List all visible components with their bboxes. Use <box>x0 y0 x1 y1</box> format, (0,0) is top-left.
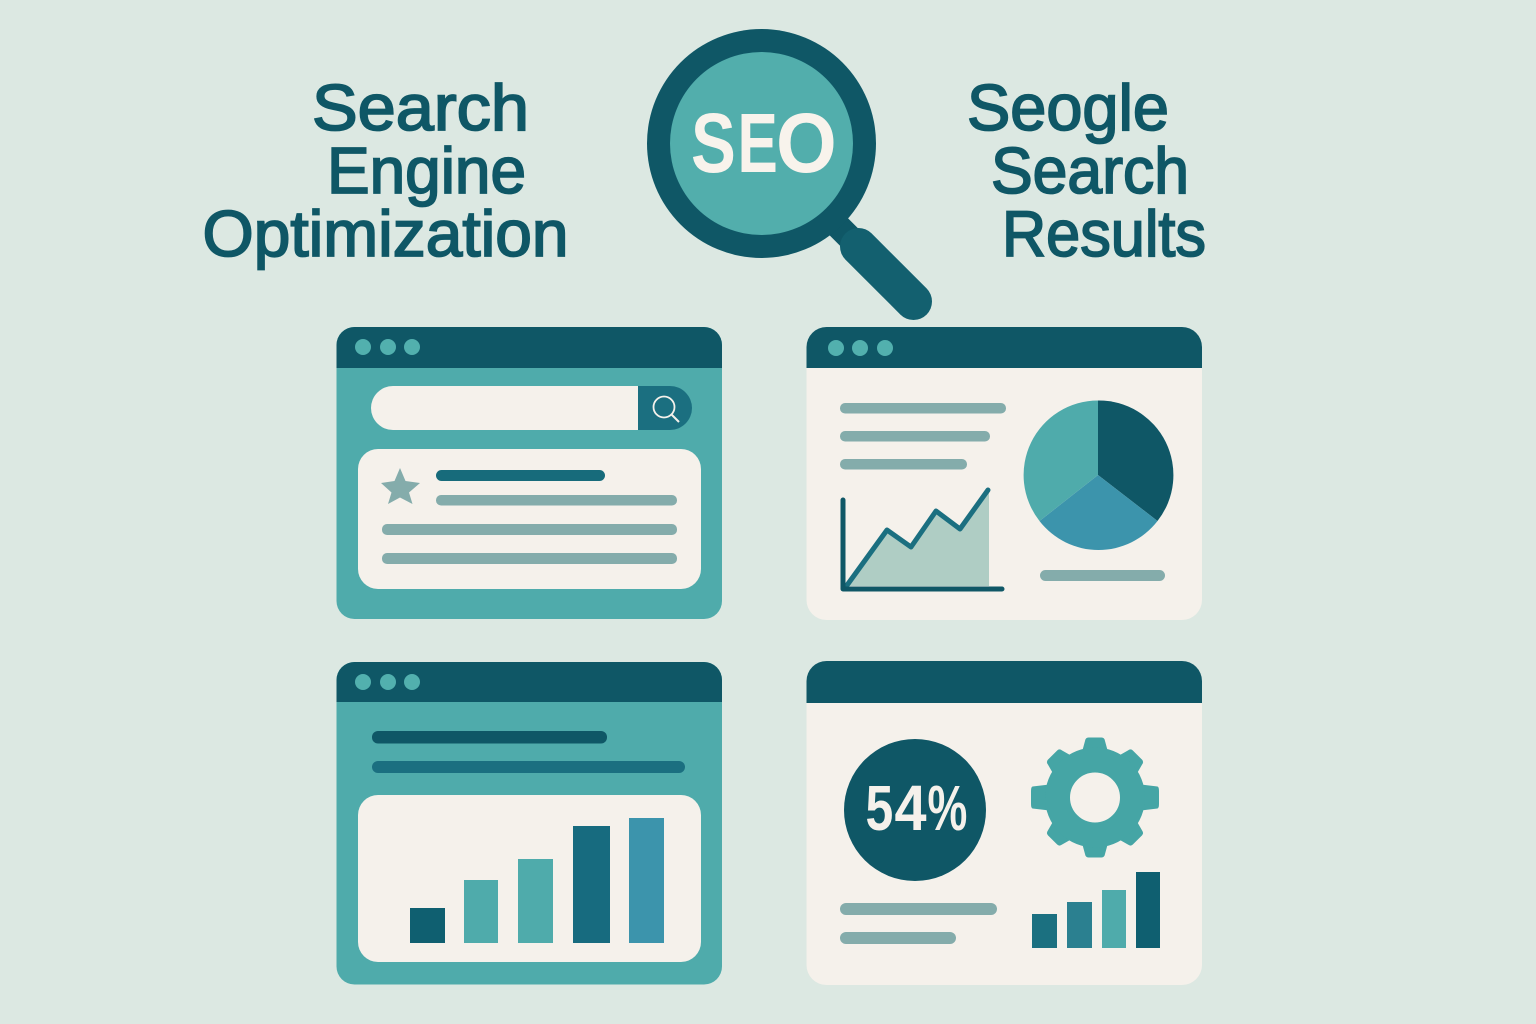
54% badge <box>844 739 986 881</box>
search bar <box>371 386 692 430</box>
pie chart <box>1024 400 1173 550</box>
result card <box>358 449 701 589</box>
panel: search results window <box>336 327 722 619</box>
heading: Search Engine Optimization <box>202 71 568 270</box>
54% badge: % <box>928 772 967 844</box>
icon: SEO magnifying glass: O <box>776 97 837 191</box>
panel: metrics window <box>806 661 1202 985</box>
panel: bar chart window <box>336 662 722 984</box>
heading: Search Engine Optimization: Optimization <box>202 197 568 270</box>
bar chart card <box>358 795 701 962</box>
icon: SEO magnifying glass: E <box>738 96 778 190</box>
54% badge: 5 <box>866 773 893 844</box>
panel: analytics window <box>806 327 1202 620</box>
small bar chart <box>1032 872 1160 948</box>
icon: SEO magnifying glass <box>647 29 914 302</box>
line chart <box>843 490 1002 589</box>
heading: Seogle Search Results: Search <box>991 134 1189 207</box>
54% badge: 4 <box>894 772 927 844</box>
icon: SEO magnifying glass: S <box>691 97 736 191</box>
heading: Search Engine Optimization: Engine <box>327 134 526 207</box>
heading: Seogle Search Results <box>967 71 1206 270</box>
icon: gear <box>1031 738 1159 858</box>
heading: Seogle Search Results: Seogle <box>967 71 1169 144</box>
heading: Search Engine Optimization: Search <box>312 71 529 144</box>
heading: Seogle Search Results: Results <box>1002 197 1206 270</box>
